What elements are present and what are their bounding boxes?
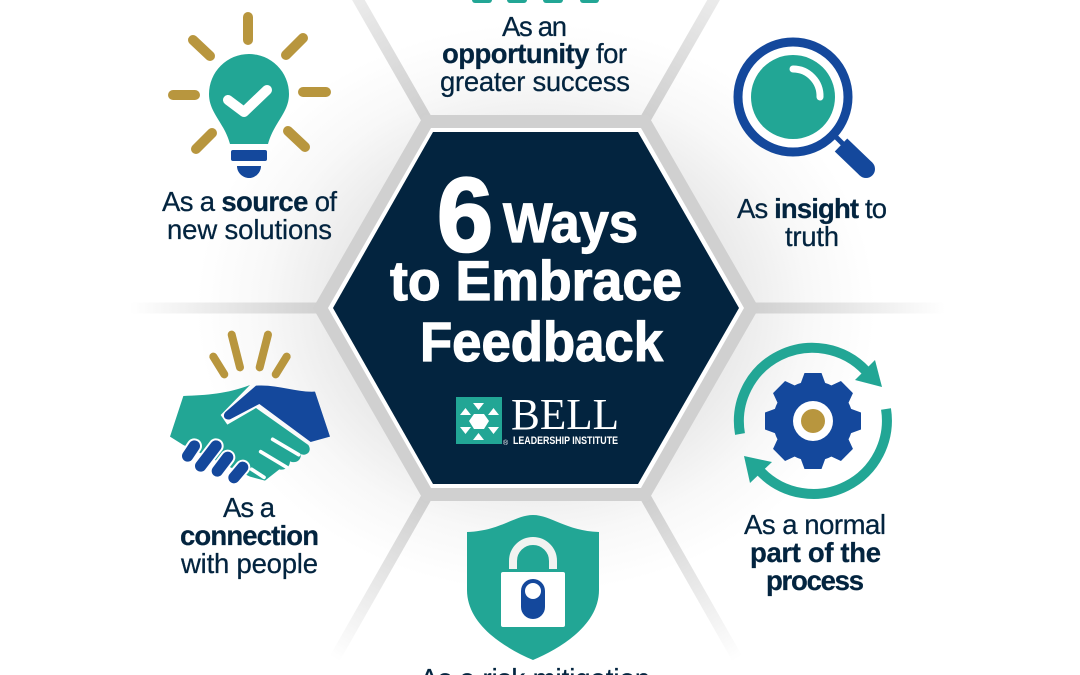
label: source of new solutions: As a source of [162,186,337,217]
icon: gear with cycle arrows [739,348,887,494]
label: connection with people: connection [180,520,319,551]
logo: Bell Leadership Institute [456,390,619,447]
label: source of new solutions [162,186,337,245]
icon: magnifying glass [738,42,875,178]
title: 6 [437,157,493,274]
label: connection with people: with people [180,548,318,579]
icon: shield with padlock [467,515,599,660]
label: normal part of the process: part of the [750,537,881,568]
label: opportunity for greater success: opportunity for [442,38,627,69]
label: insight to truth: truth [785,221,839,252]
title: to Embrace [390,249,682,312]
label: opportunity for greater success: As an [502,11,567,42]
central hexagon [313,115,759,501]
label: source of new solutions: new solutions [167,214,332,245]
logo: Bell Leadership Institute: ® [503,439,509,447]
label: opportunity for greater success [440,11,630,97]
label: connection with people [180,492,319,579]
title: Ways [503,191,638,254]
label: normal part of the process [744,509,886,596]
hexagon spokes [130,0,945,658]
title: Feedback [420,310,664,373]
label: connection with people: As a [223,492,276,523]
icon: lightbulb [173,17,326,178]
logo: Bell Leadership Institute: BELL [511,390,619,439]
label: insight to truth [737,193,887,252]
icon: handshake [170,335,330,481]
title [390,157,682,373]
label: normal part of the process: As a normal [744,509,886,540]
label: opportunity for greater success: greater success [440,66,630,97]
logo: Bell Leadership Institute: LEADERSHIP INSTITUTE [513,435,618,447]
label: insight to truth: As insight to [737,193,887,224]
icon: opportunity (cropped) [472,0,599,3]
label: normal part of the process: process [766,565,864,596]
